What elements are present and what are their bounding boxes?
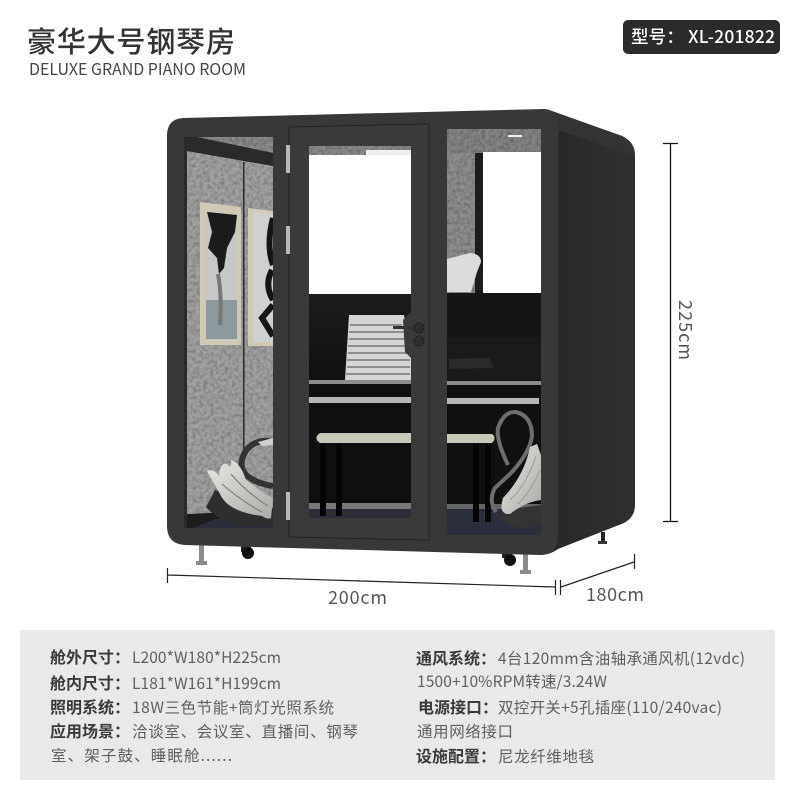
piano room cabin (167, 109, 635, 574)
model badge (623, 20, 780, 54)
spec: ventilation: 通风系统： (416, 645, 496, 669)
spec: ventilation: 4台120mm含油轴承通风机(12vdc) (498, 647, 745, 669)
spec: use cases (50, 718, 358, 766)
height dimension line (663, 143, 699, 522)
right window (447, 129, 541, 535)
door handle (393, 312, 424, 358)
spec: power: 通用网络接口 (417, 720, 513, 742)
spec: facilities: 尼龙纤维地毯 (498, 745, 594, 767)
hinges (286, 145, 290, 520)
wall painting right (248, 208, 273, 346)
door (286, 124, 429, 540)
bench (316, 433, 411, 443)
spec: lighting: 照明系统： (50, 694, 130, 718)
spec: power: 双控开关+5孔插座(110/240vac) (498, 696, 722, 718)
sheet music (345, 315, 411, 380)
width dimension line (168, 568, 556, 610)
right swan (492, 412, 541, 528)
depth dimension line (560, 554, 644, 607)
spec: interior size: L181*W161*H199cm (132, 672, 281, 694)
title (27, 19, 246, 80)
left swan (206, 438, 273, 527)
spec: use cases: 应用场景： (50, 718, 130, 742)
left window (184, 137, 273, 528)
spec: exterior size (50, 644, 281, 668)
width dimension line: 200cm (328, 584, 387, 610)
depth dimension line: 180cm (586, 581, 644, 607)
model badge: 型号： XL-201822 (631, 24, 775, 49)
subtitle: DELUXE GRAND PIANO ROOM (29, 56, 246, 80)
white chair reflection (447, 253, 481, 292)
spec: facilities (416, 743, 594, 767)
cabin front face (167, 109, 558, 555)
wall painting left (200, 202, 241, 345)
spec: lighting (50, 694, 334, 718)
title: 豪华大号钢琴房 (27, 19, 235, 61)
specifications panel (20, 630, 775, 780)
spec: lighting: 18W三色节能+筒灯光照系统 (132, 696, 334, 718)
spec: exterior size: L200*W180*H225cm (132, 646, 281, 668)
spec: facilities: 设施配置： (416, 743, 496, 767)
spec: power: 电源接口： (418, 694, 498, 718)
cabin side panel (540, 109, 635, 555)
spec: ventilation (416, 645, 745, 692)
spec: use cases: 室、架子鼓、睡眠舱...... (51, 744, 232, 766)
spec: exterior size: 舱外尺寸： (50, 644, 130, 668)
height dimension line: 225cm (673, 300, 699, 360)
spec: interior size (50, 670, 281, 694)
feet and casters (196, 532, 607, 574)
spec: use cases: 洽谈室、会议室、直播间、钢琴 (132, 720, 358, 742)
door glass with interior view (309, 146, 411, 518)
spec: interior size: 舱内尺寸： (50, 670, 130, 694)
spec: ventilation: 1500+10%RPM转速/3.24W (417, 670, 607, 692)
bench end (447, 434, 494, 443)
spec: power (417, 694, 722, 742)
